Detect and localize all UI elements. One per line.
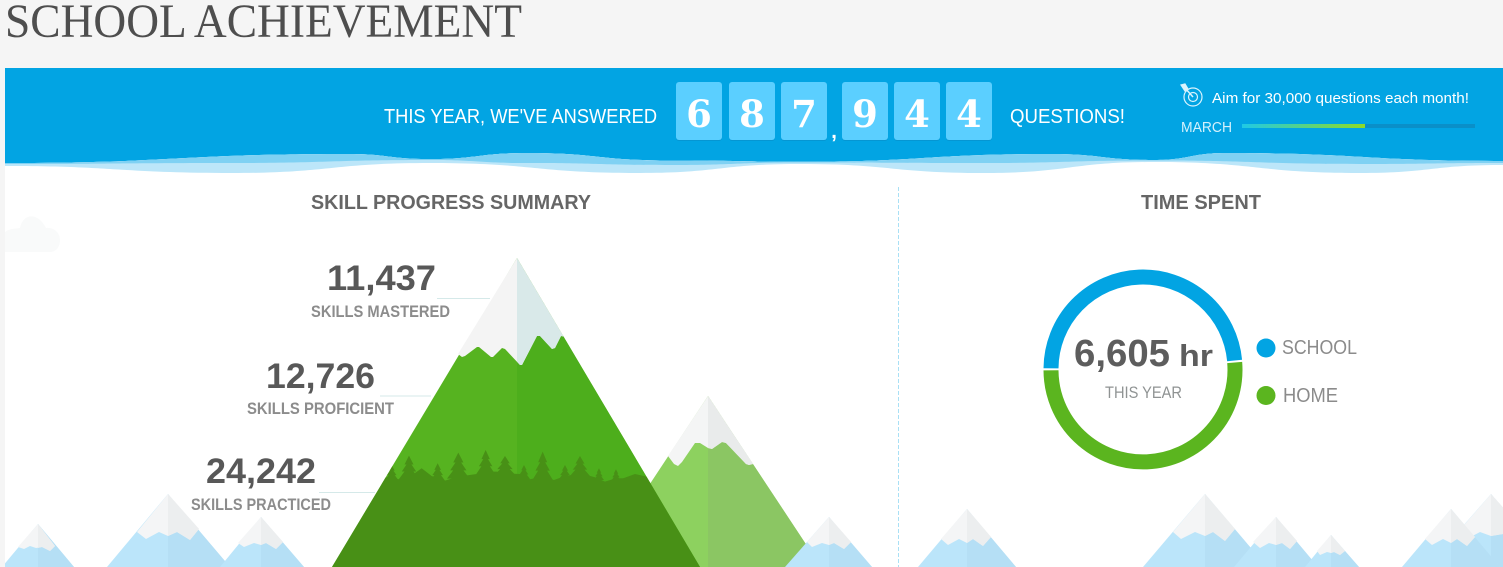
donut chart: time spent <box>1051 277 1235 462</box>
legend: HOME <box>1283 385 1338 407</box>
icon: target <box>1181 84 1202 106</box>
digit counter: 8 <box>739 92 765 136</box>
background mountains left <box>2 494 304 567</box>
mountain: small blue foreground <box>785 517 872 567</box>
mountain: light green <box>595 396 821 567</box>
month label: MARCH <box>1181 119 1232 136</box>
stat: skills proficient <box>247 357 431 418</box>
legend: SCHOOL <box>1282 337 1357 359</box>
mountain: main green <box>323 258 730 567</box>
stat: skills practiced: SKILLS PRACTICED <box>191 495 331 514</box>
forest <box>323 450 730 567</box>
snow shade <box>517 258 564 365</box>
heading: skill progress summary: SKILL PROGRESS SUMMARY <box>311 192 592 214</box>
digit counter: 4 <box>956 92 982 136</box>
heading: time spent: TIME SPENT <box>1141 192 1261 214</box>
wave band: mid <box>5 153 1503 165</box>
digit counter <box>676 82 992 143</box>
monthly goal text: Aim for 30,000 questions each month! <box>1212 90 1469 107</box>
headline right: QUESTIONS! <box>1010 106 1125 128</box>
stat: skills mastered: 11,437 <box>327 259 436 298</box>
digit counter: , <box>831 120 837 143</box>
headline left: THIS YEAR, WE'VE ANSWERED <box>384 106 657 128</box>
stat: skills practiced: 24,242 <box>206 452 316 491</box>
donut chart: time spent: hr <box>1179 338 1213 373</box>
white content panel <box>5 150 1503 567</box>
progress bar <box>1242 124 1475 128</box>
stat: skills proficient: 12,726 <box>266 357 375 396</box>
legend <box>1256 337 1357 407</box>
stat: skills mastered <box>311 259 490 321</box>
digit counter: 6 <box>686 92 712 136</box>
donut chart: time spent: 6,605 <box>1074 333 1170 375</box>
background mountains right <box>918 494 1503 567</box>
digit counter: 7 <box>791 92 817 136</box>
icon: cloud <box>5 216 60 252</box>
stat: skills proficient: SKILLS PROFICIENT <box>247 399 395 418</box>
divider <box>898 187 900 567</box>
stat: skills mastered: SKILLS MASTERED <box>311 302 450 321</box>
wave band: light <box>5 153 1503 173</box>
snow cap <box>458 258 564 365</box>
banner: questions answered <box>5 68 1503 173</box>
digit counter: 4 <box>904 92 930 136</box>
stat: skills practiced <box>191 452 375 514</box>
donut chart: time spent: THIS YEAR <box>1105 383 1182 402</box>
digit counter: 9 <box>852 92 878 136</box>
